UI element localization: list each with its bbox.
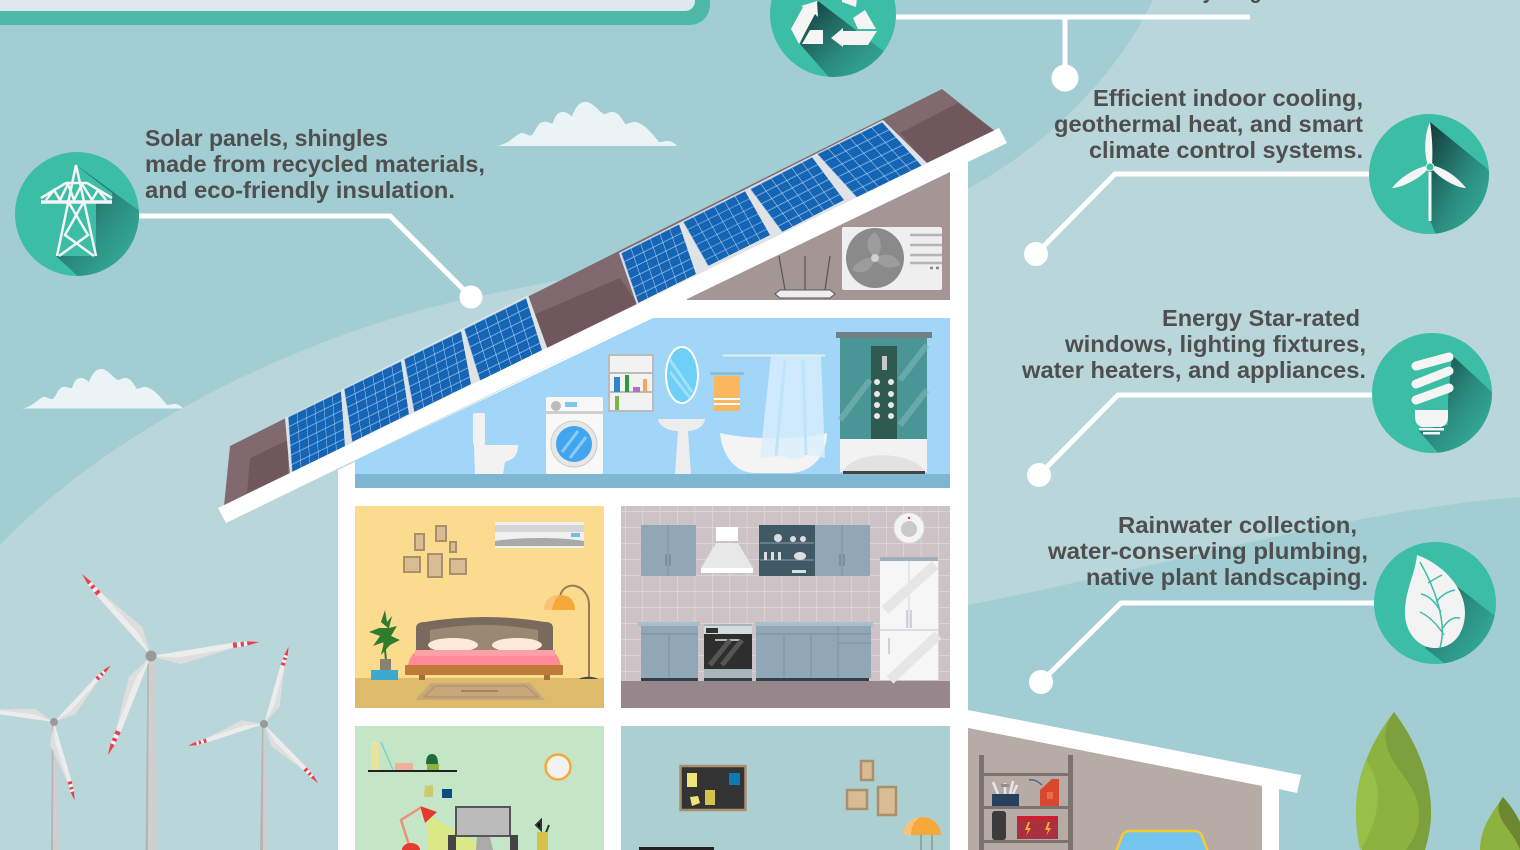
toolbox xyxy=(992,781,1019,806)
base cabinets left xyxy=(638,622,700,681)
text: energy star: water heaters, and appliances. xyxy=(1021,357,1366,383)
icon: power pylon xyxy=(15,152,145,280)
toilet xyxy=(473,413,518,474)
hallway room xyxy=(621,726,950,850)
car windshield xyxy=(1116,831,1208,850)
plant: large leaf xyxy=(1356,712,1431,850)
shelf with books xyxy=(368,742,457,772)
floor lamp xyxy=(903,817,941,850)
bathroom xyxy=(355,318,950,488)
monitor xyxy=(448,807,518,850)
text: water: water-conserving plumbing, xyxy=(1047,538,1368,564)
text: water xyxy=(1047,512,1368,590)
mirror xyxy=(666,347,698,403)
text: energy star: windows, lighting fixtures, xyxy=(1064,331,1366,357)
roof beam xyxy=(218,128,1007,523)
refrigerator xyxy=(880,557,938,680)
sticky notes xyxy=(424,785,452,798)
office room xyxy=(355,726,604,850)
house walls xyxy=(338,160,968,850)
leader line xyxy=(1041,603,1374,682)
upper cabinet right xyxy=(815,525,870,576)
text: roofing: Solar panels, shingles xyxy=(145,125,388,151)
range hood xyxy=(701,527,753,573)
floor lamp xyxy=(544,586,598,679)
cloud upper xyxy=(497,102,677,146)
icon: wind turbine xyxy=(1369,114,1495,240)
battery xyxy=(1017,816,1058,839)
text: water: Rainwater collection, xyxy=(1118,512,1357,538)
callout: roofing xyxy=(15,125,485,308)
turbine right xyxy=(185,646,320,850)
icon: light bulb xyxy=(1372,333,1495,455)
curtain rod xyxy=(722,354,826,357)
wind turbines xyxy=(0,566,320,850)
leader dot xyxy=(1052,64,1078,92)
shower cabin xyxy=(836,332,932,474)
console top xyxy=(639,847,714,850)
leader dot xyxy=(460,286,482,308)
wall cabinet xyxy=(609,355,653,411)
icon: recycle xyxy=(770,0,896,77)
text: water: native plant landscaping. xyxy=(1086,564,1368,590)
leader line xyxy=(139,216,471,297)
glass cabinet xyxy=(759,525,815,576)
kitchen xyxy=(621,506,950,708)
leader dot xyxy=(1027,463,1051,487)
text: cooling: geothermal heat, and smart xyxy=(1054,111,1363,137)
text: cooling: climate control systems. xyxy=(1089,137,1363,163)
cork board xyxy=(680,766,746,810)
callout: recycling xyxy=(770,0,1262,92)
turbine left xyxy=(0,664,117,850)
callout: cooling xyxy=(1024,85,1495,266)
plant: small leaf xyxy=(1480,797,1520,850)
roof shingles xyxy=(224,89,996,506)
desk lamp xyxy=(401,806,490,850)
leader line xyxy=(1036,174,1369,254)
shower curtain xyxy=(760,356,825,460)
title banner xyxy=(0,0,710,25)
callout: energy star xyxy=(1021,305,1495,487)
washing machine xyxy=(546,397,603,474)
garage interior xyxy=(968,728,1262,850)
leader line xyxy=(896,17,1250,78)
solar panels right array xyxy=(619,120,927,305)
wall clock xyxy=(546,754,570,780)
pencil cup xyxy=(536,820,549,850)
text: roofing: and eco-friendly insulation. xyxy=(145,177,455,203)
router xyxy=(775,256,835,298)
text: energy star: Energy Star-rated xyxy=(1162,305,1360,331)
attic room xyxy=(687,172,950,300)
tire xyxy=(992,811,1006,840)
floor xyxy=(355,474,950,488)
picture frames xyxy=(847,761,896,815)
potted plant xyxy=(369,610,400,680)
jerry can xyxy=(1029,779,1059,806)
towel xyxy=(710,372,744,411)
garage roof and wall xyxy=(968,710,1301,850)
picture frames xyxy=(404,526,466,577)
text: cooling: Efficient indoor cooling, xyxy=(1093,85,1363,111)
bedroom xyxy=(355,506,604,708)
bed xyxy=(405,617,563,680)
cloud left xyxy=(22,369,183,408)
bathtub xyxy=(720,433,827,473)
text: roofing: made from recycled materials, xyxy=(145,151,485,177)
text: cooling xyxy=(1054,85,1363,163)
outdoor AC unit xyxy=(842,227,942,290)
leader dot xyxy=(1029,670,1053,694)
text: energy star xyxy=(1021,305,1366,383)
turbine center xyxy=(80,566,261,850)
icon: leaf xyxy=(1374,542,1500,670)
sink xyxy=(658,419,705,474)
leader dot xyxy=(1024,242,1048,266)
text: roofing xyxy=(145,125,485,203)
ceiling vent xyxy=(894,513,924,543)
garage annex xyxy=(968,710,1301,850)
oven xyxy=(704,624,752,681)
base cabinets right xyxy=(755,622,873,681)
shelving xyxy=(979,755,1073,850)
rug xyxy=(415,683,545,700)
solar panels left array xyxy=(285,295,548,475)
leader line xyxy=(1039,395,1373,475)
upper cabinet left xyxy=(641,525,696,576)
wall air conditioner xyxy=(495,522,584,548)
callout: water xyxy=(1029,512,1500,694)
